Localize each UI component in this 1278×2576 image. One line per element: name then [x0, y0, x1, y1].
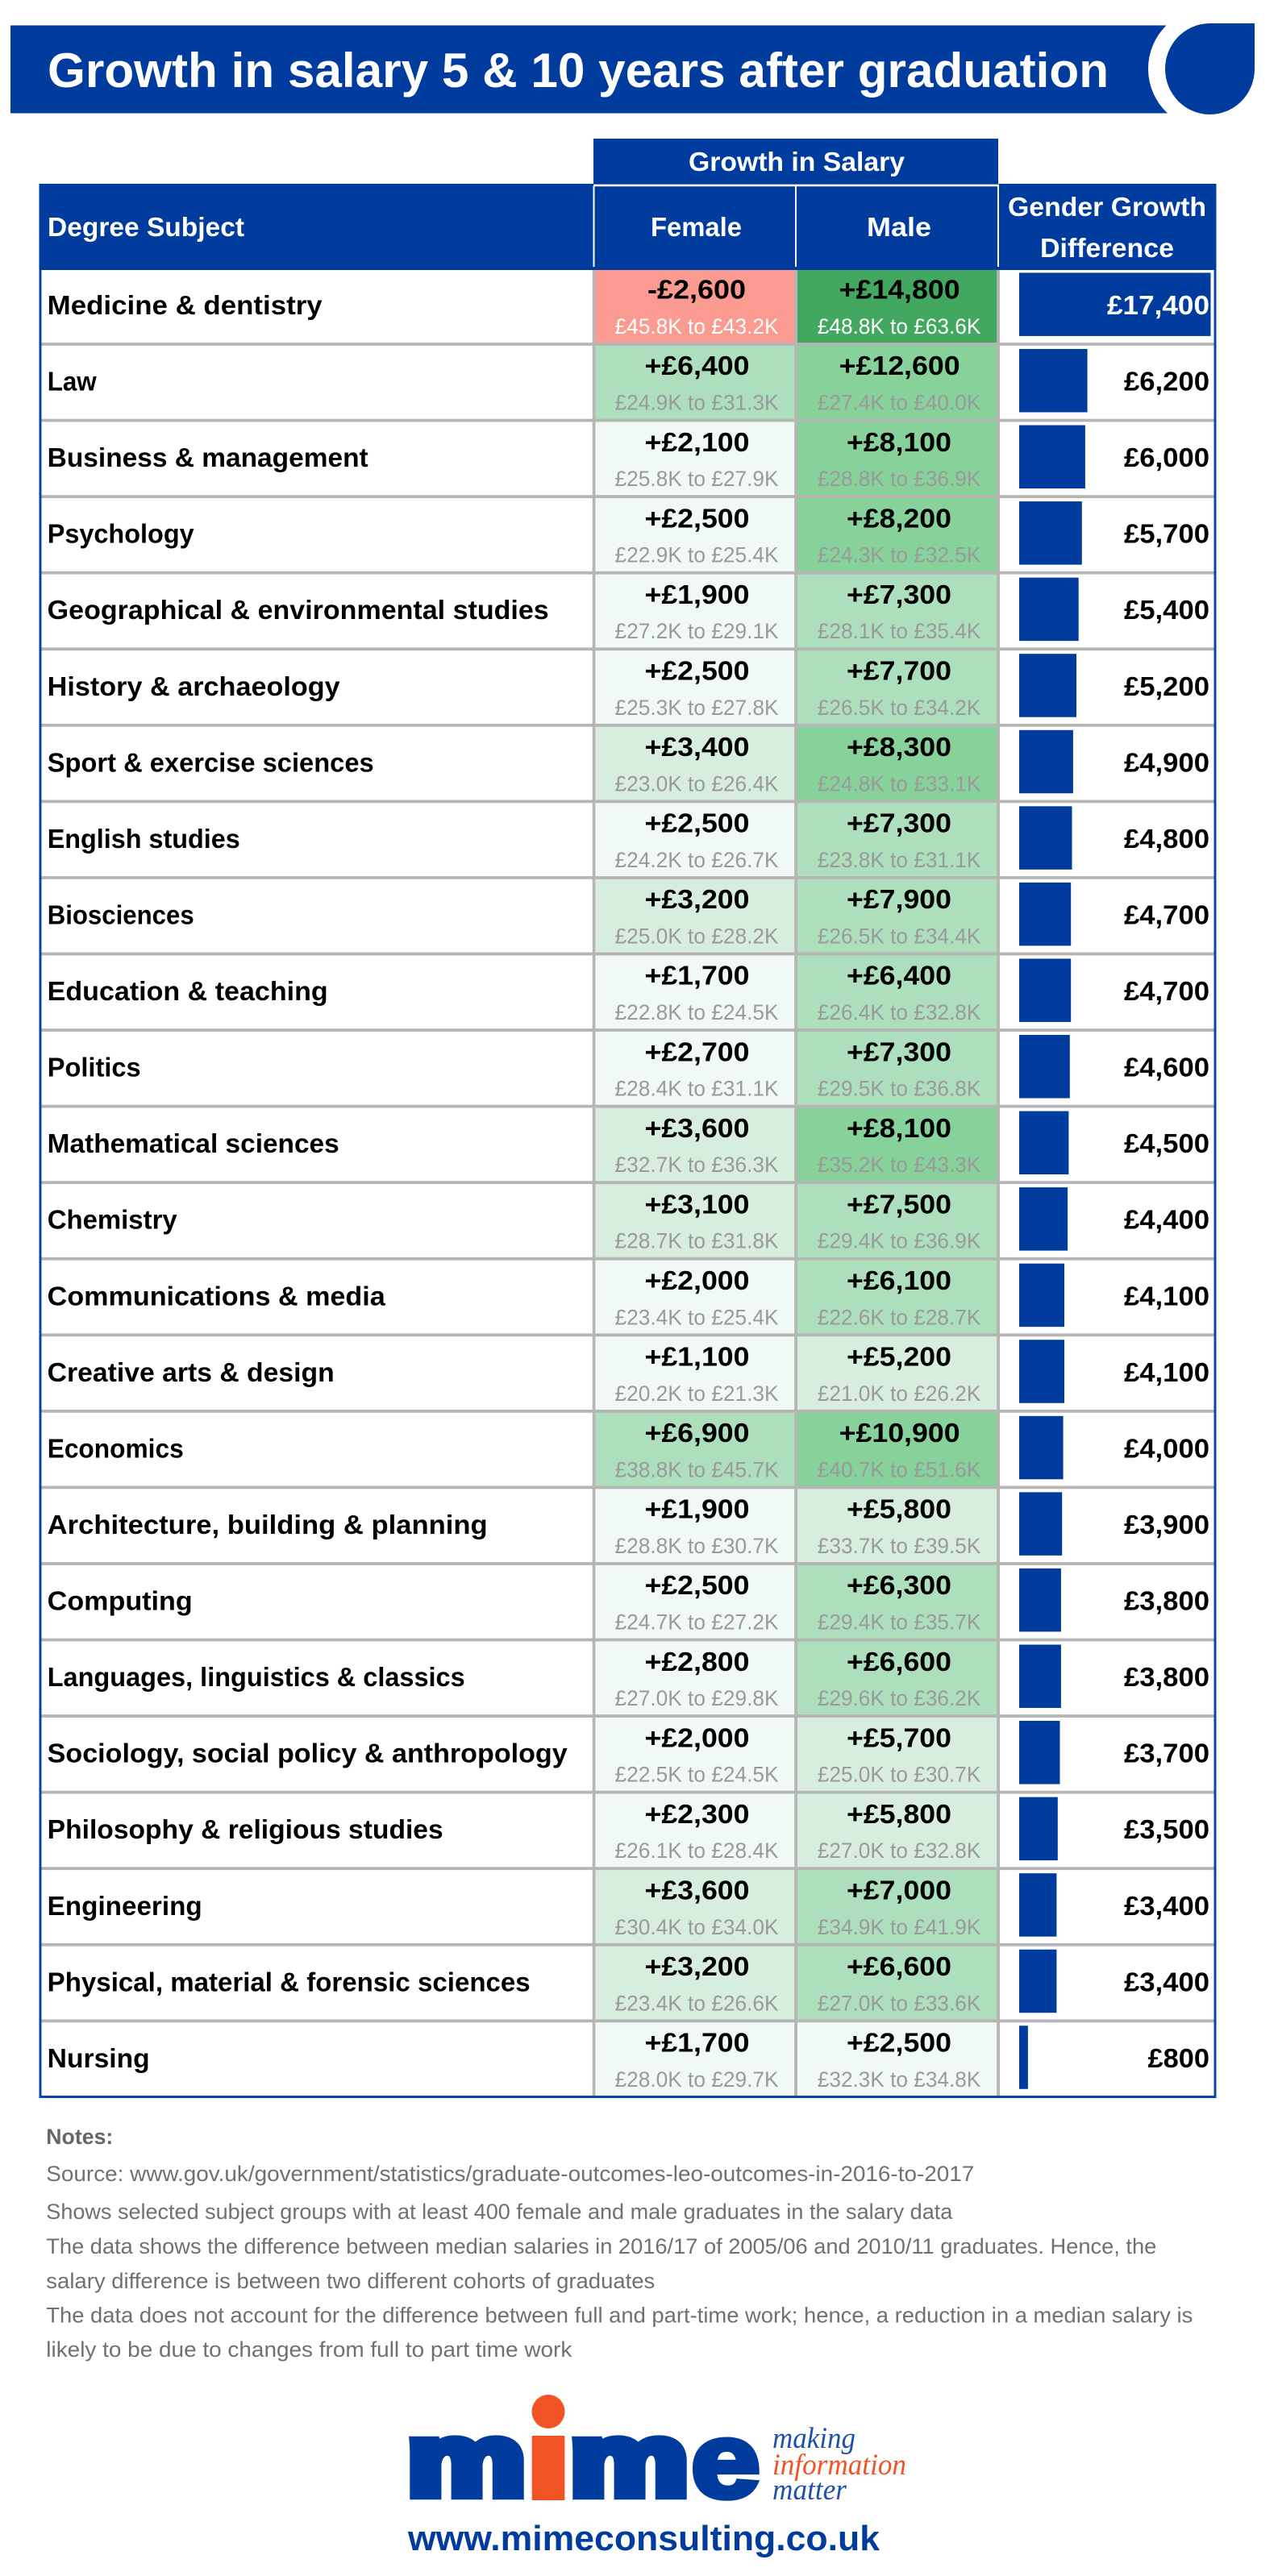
- row: Creative arts & design: [48, 1335, 1209, 1411]
- gender difference bar: £4,000: [1124, 1433, 1209, 1463]
- gender difference bar: [1019, 1492, 1209, 1556]
- female cell: £28.7K to £31.8K: [614, 1229, 779, 1253]
- male cell: £27.0K to £32.8K: [818, 1839, 980, 1863]
- male cell: £28.1K to £35.4K: [818, 619, 980, 643]
- row: Business & management: [48, 421, 1209, 497]
- note: part-time: [46, 2304, 1193, 2362]
- female cell: +£1,900: [645, 580, 750, 609]
- header: male: Male: [867, 212, 931, 242]
- row: Computing: [48, 1564, 1209, 1640]
- gender difference bar: £800: [1148, 2043, 1209, 2073]
- note: cohorts: salary difference is between two different cohorts of graduates: [46, 2269, 655, 2293]
- female cell: +£2,800: [645, 1647, 750, 1676]
- female cell: [595, 1030, 795, 1107]
- female cell: +£1,700: [645, 961, 750, 991]
- male cell: [797, 573, 997, 649]
- female cell: £22.8K to £24.5K: [614, 1000, 779, 1024]
- row: Sport & exercise sciences: [48, 725, 1209, 801]
- female cell: £30.4K to £34.0K: [614, 1915, 779, 1939]
- female cell: £32.7K to £36.3K: [614, 1153, 779, 1177]
- header: gender growth difference: Difference: [1040, 233, 1174, 263]
- subject: Psychology: [48, 519, 194, 549]
- male cell: +£8,300: [847, 732, 951, 762]
- website url: www.mimeconsulting.co.uk: [407, 2519, 880, 2558]
- gender difference bar: £3,800: [1124, 1662, 1209, 1692]
- subject: Languages, linguistics & classics: [48, 1662, 465, 1692]
- male cell: [797, 1182, 997, 1259]
- gender difference bar: [1019, 1644, 1209, 1708]
- gender difference bar: [1019, 654, 1209, 717]
- male cell: +£7,900: [847, 884, 951, 914]
- female cell: [595, 1259, 795, 1335]
- subject: Geographical & environmental studies: [48, 595, 549, 625]
- male cell: [797, 1639, 997, 1716]
- male cell: £29.5K to £36.8K: [818, 1077, 980, 1101]
- gender difference bar: [1019, 1111, 1209, 1174]
- title: Growth in salary 5 & 10 years after graduation: [48, 44, 1109, 98]
- male cell: [797, 1107, 997, 1182]
- female cell: £28.4K to £31.1K: [614, 1077, 779, 1101]
- row: Psychology: [48, 497, 1209, 573]
- logo tagline: information: [772, 2449, 906, 2482]
- logo: mime: [409, 2395, 760, 2501]
- subject: Politics: [48, 1053, 141, 1082]
- row: Mathematical sciences: [48, 1107, 1209, 1182]
- male cell: £35.2K to £43.3K: [818, 1153, 980, 1177]
- male cell: +£6,100: [847, 1265, 951, 1295]
- row: Architecture, building & planning: [48, 1487, 1209, 1564]
- female cell: £23.4K to £25.4K: [614, 1305, 779, 1329]
- logo: mime: m: [570, 2404, 689, 2516]
- header: degree subject: Degree Subject: [48, 212, 244, 242]
- male cell: +£10,900: [839, 1418, 960, 1448]
- subject: Sport & exercise sciences: [48, 747, 374, 777]
- gender difference bar: £5,400: [1124, 595, 1209, 625]
- female cell: [595, 1716, 795, 1793]
- subject: Sociology, social policy & anthropology: [48, 1739, 568, 1768]
- female cell: [595, 725, 795, 801]
- note: selection: Shows selected subject groups with at least 400 female and male graduates in the salary data: [46, 2200, 953, 2224]
- female cell: [595, 1411, 795, 1487]
- gender difference bar: £4,700: [1124, 900, 1209, 929]
- male cell: +£6,600: [847, 1647, 951, 1676]
- male cell: +£14,800: [839, 275, 960, 305]
- female cell: £45.8K to £43.2K: [614, 314, 779, 339]
- notes: [46, 2125, 1193, 2362]
- female cell: +£3,600: [645, 1113, 750, 1143]
- table rows: [48, 268, 1211, 2097]
- subject: Creative arts & design: [48, 1357, 335, 1387]
- male cell: £29.4K to £36.9K: [818, 1229, 980, 1253]
- table header: [39, 139, 1216, 270]
- male cell: +£5,700: [847, 1722, 951, 1752]
- header: gender growth difference: Gender Growth: [1008, 192, 1206, 222]
- subject: Mathematical sciences: [48, 1128, 339, 1158]
- female cell: +£1,900: [645, 1494, 750, 1524]
- subject: Business & management: [48, 442, 368, 472]
- female cell: £28.8K to £30.7K: [614, 1534, 779, 1558]
- title banner: [10, 26, 1168, 113]
- gender difference bar: [1019, 1568, 1209, 1631]
- gender difference bar: £3,700: [1124, 1739, 1209, 1768]
- male cell: [797, 954, 997, 1030]
- male cell: +£5,800: [847, 1494, 951, 1524]
- male cell: +£7,300: [847, 580, 951, 609]
- row: Law: [48, 344, 1209, 421]
- female cell: [595, 573, 795, 649]
- subject: Nursing: [48, 2043, 150, 2073]
- female cell: +£1,100: [645, 1342, 750, 1372]
- female cell: +£2,300: [645, 1799, 750, 1829]
- male cell: £27.0K to £33.6K: [818, 1991, 980, 2015]
- female cell: +£3,100: [645, 1189, 750, 1219]
- gender difference bar: [1019, 806, 1209, 870]
- male cell: +£7,300: [847, 808, 951, 838]
- female cell: -£2,600: [647, 275, 746, 305]
- female cell: £23.0K to £26.4K: [614, 771, 779, 796]
- male cell: +£8,100: [847, 1113, 951, 1143]
- male cell: £48.8K to £63.6K: [818, 314, 980, 339]
- female cell: +£3,400: [645, 732, 750, 762]
- gender difference bar: [1019, 1035, 1209, 1098]
- male cell: £24.8K to £33.1K: [818, 771, 980, 796]
- icon: banner teardrop: [1165, 23, 1255, 114]
- gender difference bar: [1019, 1797, 1209, 1860]
- female cell: [595, 344, 795, 421]
- female cell: +£1,700: [645, 2028, 750, 2058]
- subject: Education & teaching: [48, 976, 328, 1006]
- gender difference bar: £4,400: [1124, 1205, 1209, 1235]
- logo tagline: matter: [772, 2474, 847, 2507]
- header: growth in salary: Growth in Salary: [689, 147, 905, 177]
- male cell: [797, 1411, 997, 1487]
- male cell: [797, 1793, 997, 1868]
- male cell: £29.6K to £36.2K: [818, 1686, 980, 1710]
- female cell: +£6,400: [645, 351, 750, 380]
- gender difference bar: £4,800: [1124, 824, 1209, 854]
- subject: Chemistry: [48, 1205, 177, 1235]
- gender difference bar: [1019, 730, 1209, 793]
- female cell: [595, 1335, 795, 1411]
- male cell: £28.8K to £36.9K: [818, 467, 980, 491]
- male cell: +£6,600: [847, 1951, 951, 1981]
- gender difference bar: [1019, 1950, 1209, 2013]
- gender difference bar: £17,400: [1107, 290, 1209, 320]
- gender difference bar: [1019, 1416, 1209, 1479]
- gender difference bar: [1019, 958, 1209, 1022]
- female cell: £28.0K to £29.7K: [614, 2067, 779, 2092]
- male cell: [797, 1030, 997, 1107]
- female cell: £22.5K to £24.5K: [614, 1763, 779, 1787]
- row: Philosophy & religious studies: [48, 1793, 1209, 1868]
- male cell: +£5,200: [847, 1342, 951, 1372]
- logo tagline: making: [772, 2422, 855, 2455]
- female cell: [595, 1107, 795, 1182]
- male cell: £24.3K to £32.5K: [818, 543, 980, 567]
- female cell: [595, 1182, 795, 1259]
- female cell: +£2,500: [645, 656, 750, 685]
- male cell: £32.3K to £34.8K: [818, 2067, 980, 2092]
- gender difference bar: £3,500: [1124, 1814, 1209, 1844]
- subject: Biosciences: [48, 900, 194, 929]
- female cell: [595, 801, 795, 878]
- note: source: Source: www.gov.uk/government/statistics/graduate-outcomes-leo-outcomes-in-2016-to-2017: [46, 2162, 974, 2186]
- male cell: +£8,100: [847, 427, 951, 457]
- row: Engineering: [48, 1868, 1209, 1945]
- female cell: £25.8K to £27.9K: [614, 467, 779, 491]
- row: Communications & media: [48, 1259, 1209, 1335]
- header: gender growth difference: [1008, 192, 1206, 263]
- gender difference bar: £4,600: [1124, 1053, 1209, 1082]
- row: Physical, material & forensic sciences: [48, 1945, 1209, 2021]
- male cell: £21.0K to £26.2K: [818, 1381, 980, 1406]
- gender difference bar: £4,900: [1124, 747, 1209, 777]
- gender difference bar: [1019, 1264, 1209, 1327]
- note: cohorts: The data shows the difference between median salaries in 2016/17 of 2005/06 and 2010/11 graduates. Hence, the: [46, 2234, 1156, 2258]
- logo: mime: e: [691, 2401, 760, 2520]
- male cell: £26.4K to £32.8K: [818, 1000, 980, 1024]
- logo dot: [532, 2395, 564, 2429]
- note: cohorts: [46, 2234, 1156, 2293]
- female cell: +£2,100: [645, 427, 750, 457]
- row: Chemistry: [48, 1182, 1209, 1259]
- female cell: £27.2K to £29.1K: [614, 619, 779, 643]
- female cell: £25.3K to £27.8K: [614, 696, 779, 720]
- female cell: £23.4K to £26.6K: [614, 1991, 779, 2015]
- subject: Communications & media: [48, 1281, 385, 1311]
- row: Languages, linguistics & classics: [48, 1639, 1209, 1716]
- female cell: [595, 954, 795, 1030]
- female cell: +£2,000: [645, 1265, 750, 1295]
- male cell: [797, 1945, 997, 2021]
- male cell: +£7,000: [847, 1875, 951, 1905]
- male cell: +£7,500: [847, 1189, 951, 1219]
- gender difference bar: [1019, 1873, 1209, 1937]
- subject: English studies: [48, 824, 240, 854]
- female cell: [595, 1793, 795, 1868]
- logo: mime: m: [407, 2404, 526, 2516]
- row: Education & teaching: [48, 954, 1209, 1030]
- row: English studies: [48, 801, 1209, 878]
- female cell: +£3,200: [645, 1951, 750, 1981]
- notes heading: Notes:: [46, 2125, 113, 2149]
- male cell: £23.8K to £31.1K: [818, 848, 980, 872]
- logo tagline: [772, 2422, 906, 2507]
- female cell: +£3,200: [645, 884, 750, 914]
- female cell: +£2,700: [645, 1037, 750, 1066]
- female cell: [595, 268, 795, 344]
- male cell: [797, 878, 997, 954]
- gender difference bar: £4,100: [1124, 1357, 1209, 1387]
- male cell: £29.4K to £35.7K: [818, 1610, 980, 1635]
- subject: Medicine & dentistry: [48, 290, 323, 320]
- female cell: £20.2K to £21.3K: [614, 1381, 779, 1406]
- note: part-time: likely to be due to changes from full to part time work: [46, 2337, 572, 2362]
- male cell: [797, 1564, 997, 1640]
- male cell: [797, 344, 997, 421]
- logo: mime: i: [515, 2390, 581, 2526]
- male cell: [797, 801, 997, 878]
- male cell: +£7,300: [847, 1037, 951, 1066]
- gender difference bar: [1019, 1721, 1209, 1785]
- male cell: £26.5K to £34.4K: [818, 924, 980, 948]
- row: Sociology, social policy & anthropology: [48, 1716, 1209, 1793]
- gender difference bar: [1019, 349, 1209, 412]
- female cell: [595, 649, 795, 725]
- gender difference bar: £5,200: [1124, 671, 1209, 701]
- gender difference bar: £3,400: [1124, 1967, 1209, 1996]
- male cell: +£12,600: [839, 351, 960, 380]
- female cell: [595, 1564, 795, 1640]
- male cell: [797, 1716, 997, 1793]
- male cell: [797, 1259, 997, 1335]
- male cell: £22.6K to £28.7K: [818, 1305, 980, 1329]
- subject: Architecture, building & planning: [48, 1510, 488, 1539]
- female cell: £27.0K to £29.8K: [614, 1686, 779, 1710]
- subject: Physical, material & forensic sciences: [48, 1967, 531, 1996]
- gender difference bar: [1019, 1187, 1209, 1251]
- male cell: [797, 649, 997, 725]
- female cell: [595, 421, 795, 497]
- male cell: £34.9K to £41.9K: [818, 1915, 980, 1939]
- row: Nursing: [48, 2021, 1209, 2097]
- header: female: Female: [651, 212, 742, 242]
- male cell: +£8,200: [847, 503, 951, 533]
- row: History & archaeology: [48, 649, 1209, 725]
- gender difference bar: £5,700: [1124, 519, 1209, 549]
- female cell: +£2,500: [645, 808, 750, 838]
- male cell: £26.5K to £34.2K: [818, 696, 980, 720]
- gender difference bar: [1019, 883, 1209, 945]
- gender difference bar: £4,700: [1124, 976, 1209, 1006]
- female cell: £26.1K to £28.4K: [614, 1839, 779, 1863]
- male cell: [797, 497, 997, 573]
- male cell: [797, 268, 997, 344]
- gender difference bar: £6,000: [1124, 442, 1209, 472]
- subject: Law: [48, 367, 97, 397]
- female cell: [595, 1945, 795, 2021]
- male cell: +£2,500: [847, 2028, 951, 2058]
- gender difference bar: [1019, 426, 1209, 488]
- female cell: £22.9K to £25.4K: [614, 543, 779, 567]
- subject: Economics: [48, 1433, 184, 1463]
- row: Biosciences: [48, 878, 1209, 954]
- gender difference bar: [1019, 2025, 1209, 2089]
- male cell: £33.7K to £39.5K: [818, 1534, 980, 1558]
- female cell: [595, 2021, 795, 2097]
- subject: Computing: [48, 1586, 193, 1616]
- male cell: +£5,800: [847, 1799, 951, 1829]
- subject: Engineering: [48, 1891, 202, 1921]
- gender difference bar: £6,200: [1124, 367, 1209, 397]
- gender difference bar: [1019, 272, 1211, 336]
- note: part-time: The data does not account for the difference between full and part-time work; hence, a reduction in a median salary is: [46, 2304, 1193, 2328]
- gender difference bar: £4,100: [1124, 1281, 1209, 1311]
- gender difference bar: [1019, 578, 1209, 641]
- female cell: [595, 878, 795, 954]
- row: Medicine & dentistry: [48, 268, 1211, 344]
- gender difference bar: £3,900: [1124, 1510, 1209, 1539]
- female cell: £24.7K to £27.2K: [614, 1610, 779, 1635]
- female cell: [595, 497, 795, 573]
- row: Geographical & environmental studies: [48, 573, 1209, 649]
- male cell: [797, 2021, 997, 2097]
- female cell: [595, 1868, 795, 1945]
- female cell: +£2,000: [645, 1722, 750, 1752]
- gender difference bar: £4,500: [1124, 1128, 1209, 1158]
- male cell: +£6,300: [847, 1570, 951, 1600]
- male cell: [797, 725, 997, 801]
- subject: Philosophy & religious studies: [48, 1814, 443, 1844]
- female cell: £24.2K to £26.7K: [614, 848, 779, 872]
- subject: History & archaeology: [48, 671, 340, 701]
- male cell: £25.0K to £30.7K: [818, 1763, 980, 1787]
- female cell: +£6,900: [645, 1418, 750, 1448]
- female cell: [595, 1487, 795, 1564]
- male cell: £40.7K to £51.6K: [818, 1457, 980, 1481]
- male cell: £27.4K to £40.0K: [818, 391, 980, 415]
- gender difference bar: [1019, 501, 1209, 565]
- female cell: +£3,600: [645, 1875, 750, 1905]
- male cell: +£7,700: [847, 656, 951, 685]
- row: Economics: [48, 1411, 1209, 1487]
- female cell: £25.0K to £28.2K: [614, 924, 779, 948]
- male cell: [797, 1487, 997, 1564]
- female cell: £38.8K to £45.7K: [614, 1457, 779, 1481]
- female cell: +£2,500: [645, 1570, 750, 1600]
- gender difference bar: £3,800: [1124, 1586, 1209, 1616]
- row: Politics: [48, 1030, 1209, 1107]
- male cell: [797, 421, 997, 497]
- female cell: [595, 1639, 795, 1716]
- male cell: [797, 1335, 997, 1411]
- male cell: [797, 1868, 997, 1945]
- female cell: £24.9K to £31.3K: [614, 391, 779, 415]
- gender difference bar: [1019, 1340, 1209, 1403]
- male cell: +£6,400: [847, 961, 951, 991]
- gender difference bar: £3,400: [1124, 1891, 1209, 1921]
- female cell: +£2,500: [645, 503, 750, 533]
